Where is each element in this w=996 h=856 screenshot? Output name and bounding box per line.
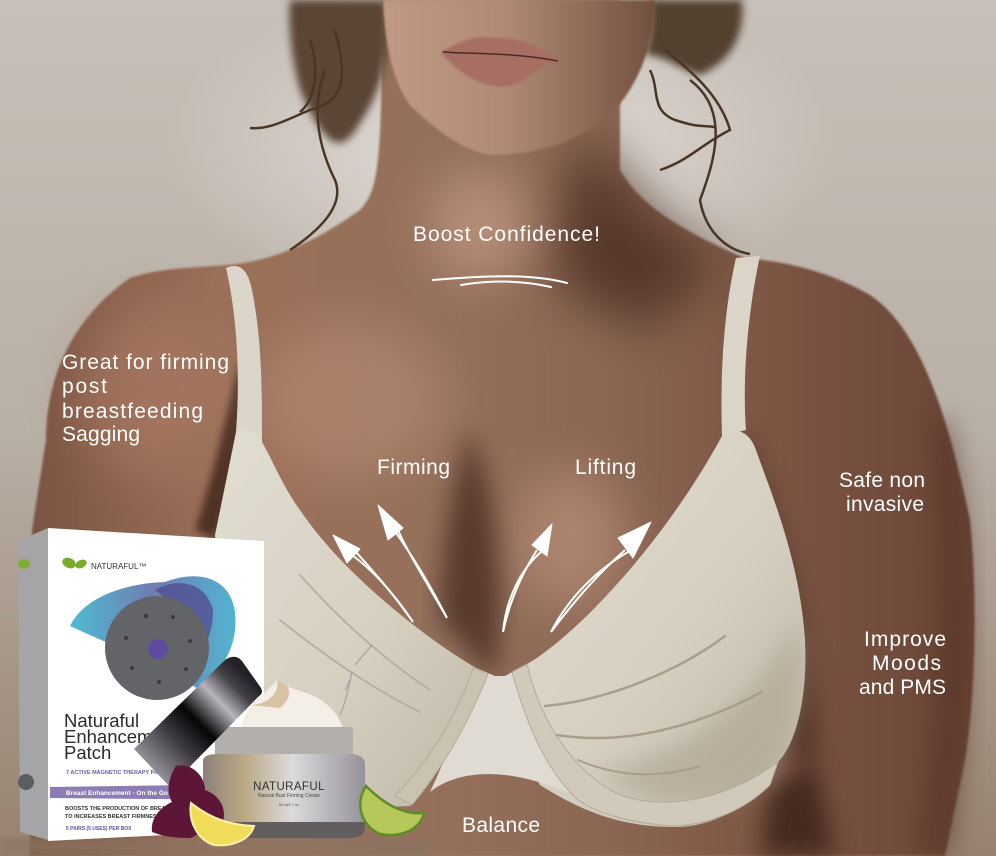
box front [48,528,264,841]
text: firming post breastfeeding [62,351,229,446]
label: Firming: Firming [377,456,450,479]
lemon slice [190,803,254,845]
background glow behind neck [160,0,840,320]
centre chest shadow [440,430,500,680]
text: safe non invasive [839,469,925,516]
neck highlight [430,170,530,280]
hair right [645,0,743,75]
chest highlight [255,320,445,480]
right arm outer shade [920,420,971,856]
jar lid [134,657,262,787]
jar size: 50 ml/1.7 oz. [279,803,299,807]
under band dark right [760,760,835,856]
underwire band left [395,668,488,805]
text: firming post breastfeeding: Great for firming [62,351,229,374]
left arm highlight [80,300,220,480]
neck and collar shadow [556,130,720,330]
cup shadow [600,620,801,803]
text: improve moods [859,628,946,699]
hair left [289,0,388,143]
magnetic patch [105,596,209,700]
hair strands [250,30,750,254]
product name: Naturaful [64,710,139,731]
centre gore [430,664,590,800]
lips [441,37,560,87]
text: firming post breastfeeding: Sagging [62,423,140,446]
arrow 2 [378,505,447,618]
label: Lifting: Lifting [575,456,636,479]
cream jar [134,645,424,845]
arrow 3 [503,524,552,632]
purple band [50,784,264,800]
jar base shadow [203,822,365,838]
right strap [722,256,760,436]
right arm shadow [735,430,820,760]
side leaf [18,559,30,569]
benefits text: BOOSTS THE PRODUCTION OF BREAST CELLS [65,806,192,812]
product name: Enhancement [64,726,178,747]
underwire band right [512,664,778,826]
label: Balance: Balance [462,814,540,837]
benefits text: TO INCREASES BREAST FIRMNESS [65,814,161,820]
cream [240,680,345,735]
side patch [18,774,34,790]
right cup [490,431,805,827]
jar neck [215,727,353,757]
blob overlap [155,583,213,655]
product name: Patch [64,742,111,763]
patch box [18,528,264,841]
text: improve moods: and PMS [859,676,946,699]
underline scribble [433,276,567,287]
text: improve moods: Improve [864,628,946,651]
therapy line: 7 ACTIVE MAGNETIC THERAPY PATCHES [66,770,176,776]
armpit shadow [195,360,244,540]
cream swirl [250,680,289,708]
product reflection [0,838,430,856]
colour blob [70,576,236,690]
text: firming post breastfeeding: post [62,375,107,398]
quantity text: 5 PAIRS (5 USES) PER BOX [66,826,132,832]
arrow 1 [333,535,413,622]
left cup [215,431,500,810]
jar sublabel: Natural Bust Firming Cream [258,793,320,799]
band text: Breast Enhancement - On the Go [66,790,168,797]
lip line [443,52,558,61]
lime slice [360,786,424,835]
box side [18,528,48,840]
text: firming post breastfeeding: breastfeeding [62,400,203,423]
text: safe non invasive: invasive [846,493,924,516]
leaf logo [61,556,88,570]
jar body [203,754,365,838]
jar label: NATURAFUL [253,781,325,793]
text: improve moods: Moods [872,652,941,675]
brand text: NATURAFUL™ [91,562,146,571]
fabric folds [280,575,762,774]
left strap [226,266,262,442]
face [383,0,655,155]
flower [152,765,224,838]
arrow 4 [551,522,651,632]
text: safe non invasive: Safe non [839,469,925,492]
headline: Boost Confidence: Boost Confidence! [413,223,600,246]
water splash [340,645,372,715]
right chest highlight [515,470,625,610]
